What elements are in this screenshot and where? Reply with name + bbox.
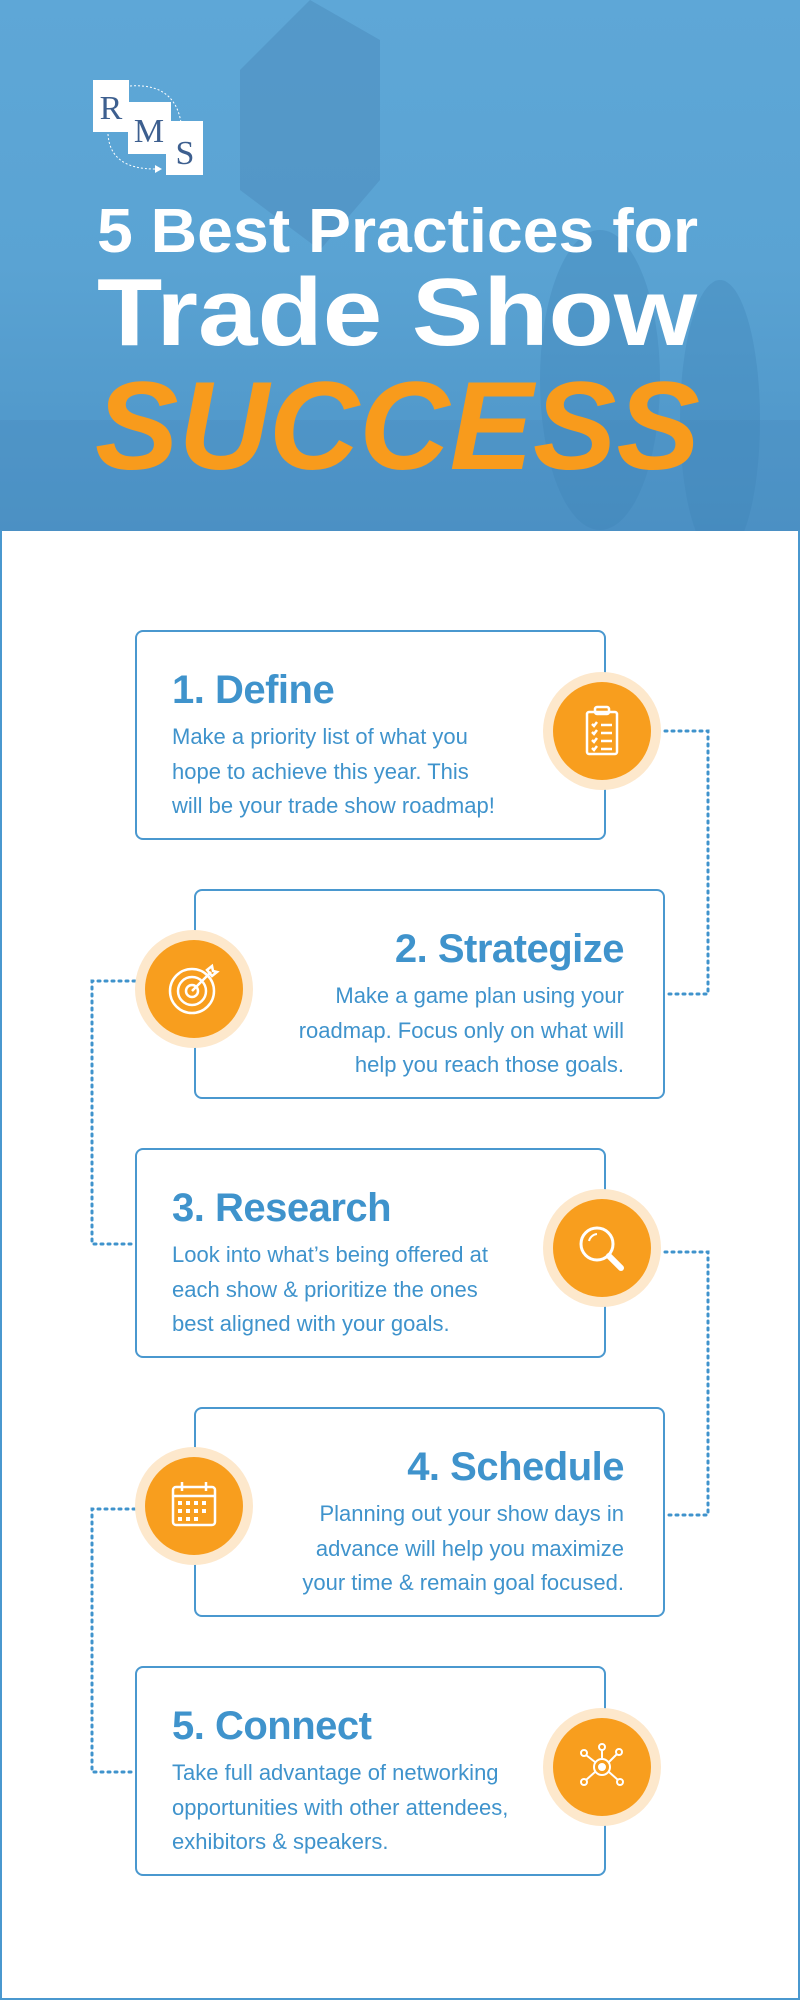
- panel: 5 Connect: Take full advantage of networking: [172, 1760, 499, 1785]
- panel: 2 Strategize: Make a game plan using your: [335, 983, 624, 1008]
- header banner: [0, 0, 800, 531]
- panel: 2 Strategize: roadmap. Focus only on what will: [299, 1018, 624, 1042]
- title: SUCCESS: [95, 357, 700, 496]
- icon: network: [543, 1708, 661, 1826]
- panel: 3 Research: 3. Research: [172, 1186, 391, 1230]
- panel: 4 Schedule: advance will help you maximize: [316, 1536, 624, 1560]
- panel: 3 Research: best aligned with your goals.: [172, 1311, 450, 1336]
- panel: 4 Schedule: Planning out your show days in: [319, 1501, 624, 1526]
- panel: 5 Connect: 5. Connect: [172, 1704, 371, 1748]
- title: 5 Best Practices for: [97, 197, 698, 266]
- panel: 2 Strategize: 2. Strategize: [395, 927, 624, 971]
- panel: 1 Define: [135, 630, 606, 840]
- panel: 3 Research: each show & prioritize the ones: [172, 1276, 478, 1302]
- logo: S: [176, 135, 194, 172]
- panel: 5 Connect: exhibitors & speakers.: [172, 1829, 388, 1854]
- panel: 3 Research: Look into what’s being offered at: [172, 1242, 488, 1267]
- panel: 3 Research: [135, 1148, 606, 1358]
- icon: magnifier: [543, 1189, 661, 1307]
- panel: 4 Schedule: 4. Schedule: [407, 1445, 624, 1489]
- panel: 1 Define: 1. Define: [172, 668, 334, 712]
- panel: 2 Strategize: help you reach those goals.: [355, 1052, 624, 1077]
- logo: R: [100, 90, 123, 127]
- title: [95, 197, 700, 496]
- panel: 1 Define: will be your trade show roadmap!: [172, 793, 495, 818]
- panel: 5 Connect: opportunities with other attendees,: [172, 1794, 508, 1820]
- logo: [93, 80, 203, 175]
- logo: M: [134, 113, 164, 150]
- panel: 2 Strategize: [194, 889, 665, 1099]
- panel: 4 Schedule: your time & remain goal focused.: [302, 1570, 624, 1595]
- panel: 4 Schedule: [194, 1407, 665, 1617]
- panel: 1 Define: hope to achieve this year. This: [172, 758, 469, 784]
- panel: 1 Define: Make a priority list of what you: [172, 724, 468, 749]
- title: Trade Show: [97, 259, 697, 366]
- icon: calendar: [135, 1447, 253, 1565]
- panel: 5 Connect: [135, 1666, 606, 1876]
- icon: clipboard: [543, 672, 661, 790]
- icon: target: [135, 930, 253, 1048]
